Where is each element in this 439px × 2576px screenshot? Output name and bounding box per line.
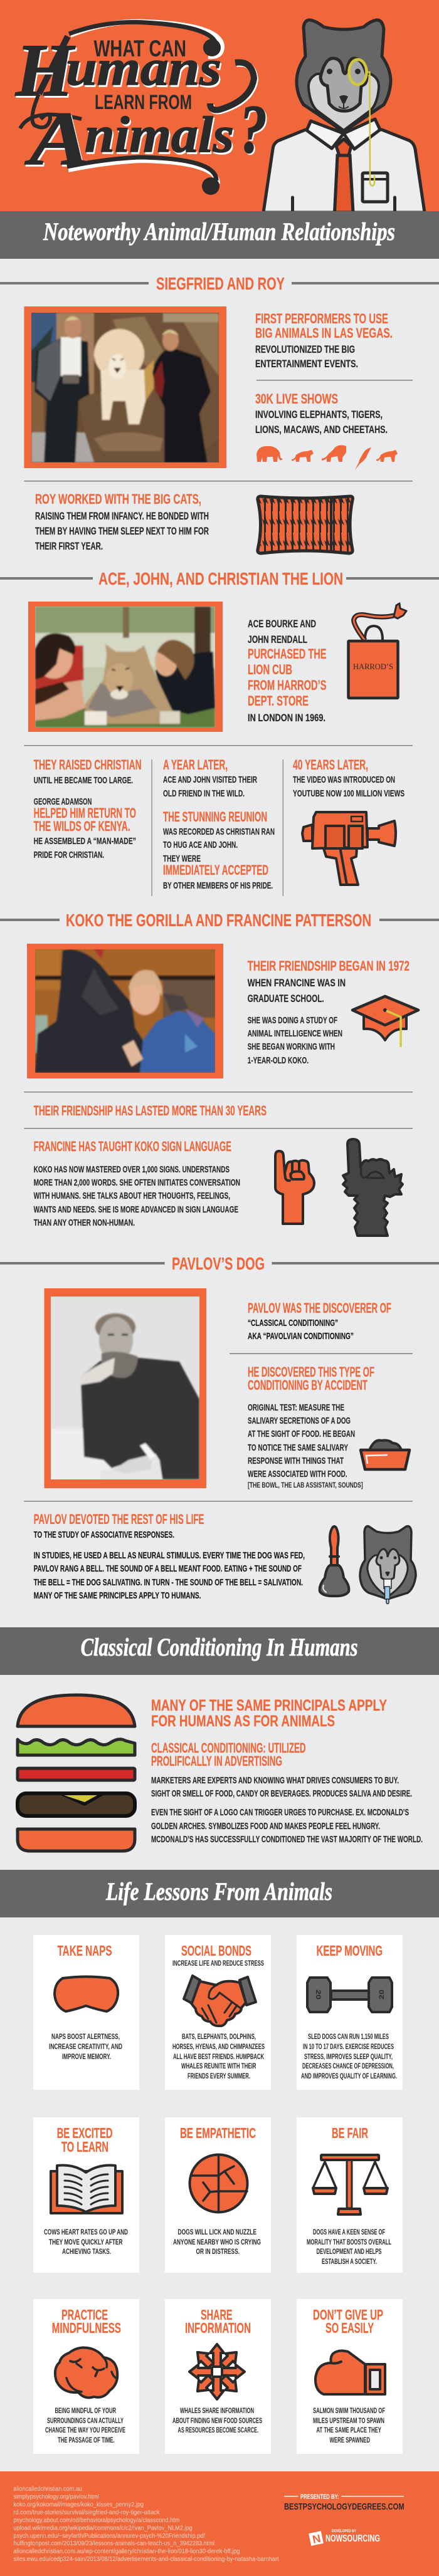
top bun	[18, 1695, 135, 1726]
card: don't give up so easily: DON’T GIVE UP	[313, 2307, 383, 2323]
tomato	[18, 1768, 135, 1780]
text: Ace Bourke and John Rendall: IN LONDON IN 1969.	[248, 712, 325, 724]
card: take naps: IMPROVE MEMORY.	[62, 2052, 111, 2061]
icon: graduation cap	[352, 996, 418, 1047]
section band: Noteworthy Animal/Human Relationships	[0, 211, 439, 259]
card: practice mindfulness: MINDFULNESS	[52, 2320, 121, 2336]
text column: a year later: ACE AND JOHN VISITED THEIR	[163, 774, 257, 785]
card: practice mindfulness: CHANGE THE WAY YOU PERCEIVE	[45, 2426, 125, 2434]
card: social bonds: SOCIAL BONDS	[181, 1942, 251, 1959]
photo: Ace, John and Christian the lion	[28, 602, 223, 732]
card: don't give up so easily: WERE SPAWNED	[330, 2436, 370, 2444]
title: What Can Humans Learn From Animals?: ?	[241, 92, 268, 169]
card: practice mindfulness: BEING MINDFUL OF YOUR	[55, 2406, 116, 2415]
title: What Can Humans Learn From Animals?: WHAT CAN	[94, 36, 186, 61]
text: Roy worked with the big cats	[35, 491, 209, 552]
card: be empathetic: BE EMPATHETIC	[180, 2125, 256, 2141]
icon: eight outward arrows	[189, 2344, 245, 2399]
icon: burger	[18, 1695, 135, 1851]
card: share information: SHARE	[201, 2307, 232, 2323]
title: What Can Humans Learn From Animals?: H	[16, 30, 77, 113]
heading: Pavlov's Dog: PAVLOV’S DOG	[172, 1254, 265, 1273]
text: Pavlov devoted his life: IN STUDIES, HE USED A BELL AS NEURAL STIMULUS. EVERY TIME THE DOG WAS FED,	[34, 1550, 305, 1561]
icon: human hand signing	[275, 1151, 314, 1224]
card: share information: AS RESOURCES BECOME SCARCE.	[178, 2426, 258, 2434]
text: their friendship began in 1972: GRADUATE SCHOOL.	[248, 993, 324, 1004]
text: Francine taught Koko sign language: FRANCINE HAS TAUGHT KOKO SIGN LANGUAGE	[34, 1139, 231, 1154]
title: What Can Humans Learn From Animals?: nimals	[86, 108, 235, 165]
text: same principals apply	[151, 1697, 423, 1845]
icon: sleep mask	[55, 1976, 118, 2011]
text column: a year later: WAS RECORDED AS CHRISTIAN RAN	[163, 827, 275, 837]
card: be empathetic: OR IN DISTRESS.	[196, 2247, 240, 2256]
text: their friendship began in 1972: SHE BEGAN WORKING WITH	[248, 1041, 335, 1052]
lettuce	[18, 1739, 135, 1755]
text: discovered by accident: WERE ASSOCIATED WITH FOOD.	[248, 1469, 347, 1479]
card: be fair	[297, 2117, 403, 2273]
card: take naps	[33, 1935, 139, 2090]
text: Francine taught Koko sign language: KOKO HAS NOW MASTERED OVER 1,000 SIGNS. UNDERSTANDS	[34, 1164, 230, 1175]
text: first performers	[255, 311, 393, 370]
text: Ace Bourke and John Rendall: FROM HARROD’S	[248, 677, 326, 693]
card: don't give up so easily: MILES UPSTREAM TO SPAWN	[313, 2416, 384, 2425]
text: Francine taught Koko sign language: WANTS AND NEEDS. SHE IS MORE ADVANCED IN SIGN LANGUAGE	[34, 1204, 238, 1215]
text: Pavlov devoted his life	[34, 1511, 305, 1601]
card: social bonds	[165, 1935, 271, 2090]
card: practice mindfulness: PRACTICE	[61, 2307, 108, 2323]
section band: Classical Conditioning In Humans	[0, 1627, 439, 1675]
text: Ace Bourke and John Rendall: PURCHASED THE	[248, 646, 326, 662]
card: don't give up so easily: SO EASILY	[325, 2320, 374, 2336]
card: social bonds: WHALES REUNITE WITH THEIR	[181, 2062, 257, 2070]
card: take naps: INCREASE CREATIVITY, AND	[49, 2042, 122, 2051]
text: Pavlov devoted his life: TO THE STUDY OF ASSOCIATIVE RESPONSES.	[34, 1530, 174, 1540]
section band: Classical Conditioning In Humans: Classical Conditioning In Humans	[81, 1633, 358, 1661]
text column: a year later: THEY WERE	[163, 853, 201, 864]
text: 30K live shows: INVOLVING ELEPHANTS, TIGERS,	[255, 409, 383, 420]
text column: a year later: TO HUG ACE AND JOHN.	[163, 840, 238, 850]
icon: Harrod's bag with lion tail: HARROD’S	[353, 662, 393, 671]
text: discovered by accident: AT THE SIGHT OF FOOD. HE BEGAN	[248, 1429, 355, 1439]
icon: balance scale	[313, 2155, 388, 2214]
footer panel	[0, 2471, 439, 2576]
text: Pavlov discoverer: “CLASSICAL CONDITIONING”	[248, 1318, 338, 1328]
card: don't give up so easily	[297, 2299, 403, 2454]
card: social bonds: ALL HAVE BEST FRIENDS. HUMPBACK	[173, 2052, 264, 2061]
text column: they raised Christian: HE ASSEMBLED A “MAN-MADE”	[34, 836, 136, 847]
card: social bonds: INCREASE LIFE AND REDUCE STRESS	[172, 1959, 264, 1968]
text: Francine taught Koko sign language	[34, 1139, 240, 1228]
text: Roy worked with the big cats: THEIR FIRST YEAR.	[35, 541, 103, 552]
heading: Ace, John, and Christian the Lion: ACE, JOHN, AND CHRISTIAN THE LION	[98, 569, 343, 588]
text: Pavlov devoted his life: PAVLOV DEVOTED THE REST OF HIS LIFE	[34, 1511, 204, 1527]
text: first performers: ENTERTAINMENT EVENTS.	[255, 358, 358, 370]
text: discovered by accident: SALIVARY SECRETIONS OF A DOG	[248, 1416, 351, 1426]
title: What Can Humans Learn From Animals?: A	[26, 98, 91, 183]
text: 30K live shows: LIONS, MACAWS, AND CHEETAHS.	[255, 424, 388, 435]
icon: dumbbell: 20	[378, 1989, 386, 2000]
text column: a year later: IMMEDIATELY ACCEPTED	[163, 862, 268, 878]
text: Pavlov devoted his life: THE BELL = THE DOG SALIVATING. IN TURN - THE SOUND OF THE BELL = SALIVATION.	[34, 1577, 303, 1588]
icon: boxing glove	[315, 2351, 385, 2394]
title: What Can Humans Learn From Animals?: LEARN FROM	[95, 91, 192, 113]
text: Francine taught Koko sign language: WITH HUMANS. SHE TALKS ABOUT HER THOUGHTS, FEELINGS,	[34, 1191, 230, 1201]
icon: ball	[189, 2154, 247, 2212]
source list: rd.com/true-stories/survival/siegfried-and-roy-tiger-attack	[13, 2508, 160, 2516]
source list: alioncalledchristian.com.au	[13, 2485, 82, 2493]
text: 30K live shows: 30K LIVE SHOWS	[255, 391, 338, 407]
title: What Can Humans Learn From Animals?: umans	[66, 41, 221, 96]
text: same principals apply: PROLIFICALLY IN ADVERTISING	[151, 1753, 282, 1769]
card: practice mindfulness	[33, 2299, 139, 2454]
photo: Siegfried, Roy and white lion	[24, 306, 226, 468]
text: Ace Bourke and John Rendall: ACE BOURKE AND	[248, 618, 316, 630]
presented by credit	[284, 2493, 405, 2512]
source list: psych.upenn.edu/~seyfarth/Publications/annurev-psych-%20Friendship.pdf	[13, 2532, 205, 2540]
text: Ace Bourke and John Rendall: JOHN RENDALL	[248, 634, 307, 645]
card: be excited to learn: TO LEARN	[61, 2139, 108, 2155]
photo: Koko and Francine	[27, 944, 223, 1078]
text column: a year later: BY OTHER MEMBERS OF HIS PRIDE.	[163, 880, 273, 891]
card: take naps: TAKE NAPS	[58, 1942, 112, 1959]
patty and cheese	[18, 1793, 135, 1816]
text: their friendship began in 1972	[248, 958, 410, 1066]
character: dog-headed man in shirt and monocle	[263, 20, 425, 212]
text: discovered by accident: [THE BOWL, THE LAB ASSISTANT, SOUNDS]	[248, 1481, 363, 1489]
source list: huffingtonpost.com/2013/09/23/lessons-animals-can-teach-us_n_3942283.html	[13, 2540, 214, 2547]
card: be excited to learn: BE EXCITED	[57, 2125, 113, 2141]
card: keep moving: SLED DOGS CAN RUN 1,150 MILES	[308, 2032, 389, 2041]
text: same principals apply: FOR HUMANS AS FOR ANIMALS	[151, 1713, 335, 1730]
text: Roy worked with the big cats: THEM BY HAVING THEM SLEEP NEXT TO HIM FOR	[35, 526, 209, 537]
source list	[13, 2485, 279, 2563]
text: same principals apply: CLASSICAL CONDITIONING: UTILIZED	[151, 1740, 306, 1756]
source list: simplypsychology.org/pavlov.html	[13, 2493, 99, 2500]
text column: they raised Christian: THEY RAISED CHRISTIAN	[34, 757, 142, 773]
text column: they raised Christian: UNTIL HE BECAME TOO LARGE.	[34, 775, 133, 786]
text column: a year later: OLD FRIEND IN THE WILD.	[163, 788, 245, 799]
text: Pavlov discoverer: AKA “PAVOLVIAN CONDITIONING”	[248, 1331, 354, 1342]
card: share information: ABOUT FINDING NEW FOOD SOURCES	[172, 2416, 262, 2425]
icons: elephant, tiger, lion, macaw, cheetah	[257, 445, 398, 470]
text: Francine taught Koko sign language: MORE THAN 2,000 WORDS. SHE OFTEN INITIATES CONVERSATION	[34, 1177, 240, 1188]
source list: alioncalledchristian.com.au/wp-content/gallery/christian-the-lion/018-lion30-derek-bff.jpg	[13, 2548, 240, 2555]
card: social bonds: FRIENDS EVERY SUMMER.	[188, 2072, 250, 2080]
title: What Can Humans Learn From Animals?: H	[15, 28, 76, 112]
text: discovered by accident	[248, 1364, 374, 1489]
section band: Life Lessons From Animals	[0, 1870, 439, 1917]
text: Ace Bourke and John Rendall	[248, 618, 326, 724]
card: keep moving	[297, 1935, 403, 2090]
text: Pavlov discoverer	[248, 1300, 391, 1342]
card: be excited to learn	[33, 2117, 139, 2273]
card: be fair: ESTABLISH A SOCIETY.	[322, 2257, 377, 2266]
card: be empathetic: DOGS WILL LICK AND NUZZLE	[178, 2228, 257, 2236]
icon: gorilla hand signing	[343, 1139, 403, 1236]
text: discovered by accident: RESPONSE WITH THINGS THAT	[248, 1456, 344, 1466]
photo: Ivan Pavlov portrait	[44, 1288, 206, 1488]
card: take naps: NAPS BOOST ALERTNESS,	[51, 2032, 120, 2041]
icon: dog bowl	[361, 1440, 410, 1469]
card: be excited to learn: THEY MOVE QUICKLY AFTER	[49, 2238, 123, 2246]
text column: they raised Christian: PRIDE FOR CHRISTIAN.	[34, 850, 104, 860]
text column: they raised Christian: GEORGE ADAMSON	[34, 796, 92, 807]
icon: dumbbell	[307, 1978, 392, 2012]
text: their friendship began in 1972: ANIMAL INTELLIGENCE WHEN	[248, 1028, 342, 1039]
card: be fair: MORALITY THAT BOOSTS OVERALL	[307, 2238, 391, 2246]
text: their friendship began in 1972: SHE WAS DOING A STUDY OF	[248, 1015, 337, 1026]
icon: brain	[55, 2348, 117, 2397]
card: be empathetic: ANYONE NEARBY WHO IS CRYING	[173, 2238, 261, 2246]
title: What Can Humans Learn From Animals?: ?	[240, 91, 267, 167]
card: share information: WHALES SHARE INFORMATION	[180, 2406, 254, 2415]
text column: a year later: A YEAR LATER,	[163, 757, 228, 773]
heading: Siegfried and Roy	[0, 274, 439, 293]
source list: koko.org/kokomail/images/koko_kisses_penny2.jpg	[13, 2501, 144, 2508]
section band: Life Lessons From Animals: Life Lessons From Animals	[105, 1877, 332, 1906]
source list: sites.ewu.edu/cedp324-sain/2013/08/12/advertisements-and-classical-conditioning-by-natasha-barnhart	[13, 2555, 279, 2563]
text: Pavlov devoted his life: PAVLOV RANG A BELL. THE SOUND OF A BELL MEANT FOOD. EATING + THE SOUND OF	[34, 1563, 302, 1574]
card: don't give up so easily: SALMON SWIM THOUSAND OF	[313, 2406, 385, 2415]
text column: a year later	[163, 757, 275, 891]
presented by credit: PRESENTED BY:	[300, 2493, 339, 2501]
text: their friendship began in 1972: 1-YEAR-OLD KOKO.	[248, 1055, 309, 1066]
source list: upload.wikimedia.org/wikipedia/commons/c/c2/Ivan_Pavlov_NLM2.jpg	[13, 2524, 193, 2532]
icon: tiger-striped pillow	[258, 496, 352, 553]
card: don't give up so easily: AT THE SAME PLACE THEY	[316, 2426, 381, 2434]
card: be fair: BE FAIR	[332, 2125, 368, 2141]
card: keep moving: KEEP MOVING	[316, 1942, 383, 1959]
text: Roy worked with the big cats: RAISING THEM FROM INFANCY. HE BONDED WITH	[35, 511, 209, 522]
bottom bun	[18, 1829, 135, 1851]
icon: Harrod's bag with lion tail	[349, 603, 406, 698]
text: friendship has lasted: THEIR FRIENDSHIP HAS LASTED MORE THAN 30 YEARS	[34, 1103, 267, 1119]
nowsourcing logo	[309, 2530, 380, 2546]
text: Francine taught Koko sign language: THAN ANY OTHER NON-HUMAN.	[34, 1218, 135, 1228]
text column: they raised Christian	[34, 757, 142, 860]
text column: a year later: THE STUNNING REUNION	[163, 809, 267, 825]
card: practice mindfulness: SURROUNDINGS CAN ACTUALLY	[47, 2416, 124, 2425]
heading: Pavlov's Dog	[0, 1254, 439, 1273]
card: practice mindfulness: THE PASSAGE OF TIME.	[58, 2436, 115, 2444]
card: be excited to learn: COWS HEART RATES GO UP AND	[44, 2228, 128, 2236]
text column: 40 years later	[293, 757, 405, 799]
icon: video camera	[302, 812, 396, 885]
text: 30K live shows	[255, 391, 388, 435]
card: be empathetic	[165, 2117, 271, 2273]
title: What Can Humans Learn From Animals?: nimals	[85, 106, 234, 163]
text: their friendship began in 1972: WHEN FRANCINE WAS IN	[248, 978, 346, 989]
text: Roy worked with the big cats: ROY WORKED WITH THE BIG CATS,	[35, 491, 201, 507]
text: first performers: REVOLUTIONIZED THE BIG	[255, 344, 355, 355]
title: What Can Humans Learn From Animals?	[15, 22, 268, 195]
card: share information: INFORMATION	[185, 2320, 251, 2336]
heading: Siegfried and Roy: SIEGFRIED AND ROY	[156, 274, 285, 293]
header panel	[0, 0, 439, 212]
icon: dumbbell: 20	[314, 1989, 322, 2000]
card: be fair: DEVELOPMENT AND HELPS	[316, 2247, 381, 2256]
card: social bonds: BATS, ELEPHANTS, DOLPHINS,	[182, 2032, 256, 2041]
card: share information	[165, 2299, 271, 2454]
icon: bell	[320, 1526, 349, 1596]
source list: psychology.about.com/od/behavioralpsychology/a/classcond.htm	[13, 2516, 180, 2524]
icon: handshake	[184, 1976, 256, 2026]
title: What Can Humans Learn From Animals?: A	[24, 96, 90, 181]
card: keep moving: STRESS, IMPROVES SLEEP QUALITY,	[304, 2052, 393, 2061]
card: social bonds: HORSES, HYENAS, AND CHIMPANZEES	[172, 2042, 265, 2051]
card: be excited to learn: ACHIEVING TASKS.	[62, 2247, 111, 2256]
title: What Can Humans Learn From Animals?: umans	[67, 43, 223, 98]
text column: they raised Christian: THE WILDS OF KENYA.	[34, 818, 130, 834]
icon: salivating dog	[360, 1526, 416, 1604]
text: discovered by accident: TO NOTICE THE SAME SALIVARY	[248, 1442, 348, 1453]
card: be fair: DOGS HAVE A KEEN SENSE OF	[313, 2228, 385, 2236]
text column: they raised Christian: HELPED HIM RETURN TO	[34, 805, 136, 821]
text: Ace Bourke and John Rendall: DEPT. STORE	[248, 693, 309, 709]
icon: open book	[51, 2165, 122, 2213]
nowsourcing logo: NOWSOURCING	[325, 2533, 380, 2544]
text: Ace Bourke and John Rendall: LION CUB	[248, 662, 292, 677]
nowsourcing logo: DEVELOPED BY	[332, 2530, 356, 2533]
nowsourcing logo: N	[311, 2532, 322, 2546]
text column: 40 years later: 40 YEARS LATER,	[293, 757, 368, 773]
text: discovered by accident: ORIGINAL TEST: MEASURE THE	[248, 1402, 344, 1413]
text: Pavlov devoted his life: MANY OF THE SAME PRINCIPLES APPLY TO HUMANS.	[34, 1590, 201, 1601]
